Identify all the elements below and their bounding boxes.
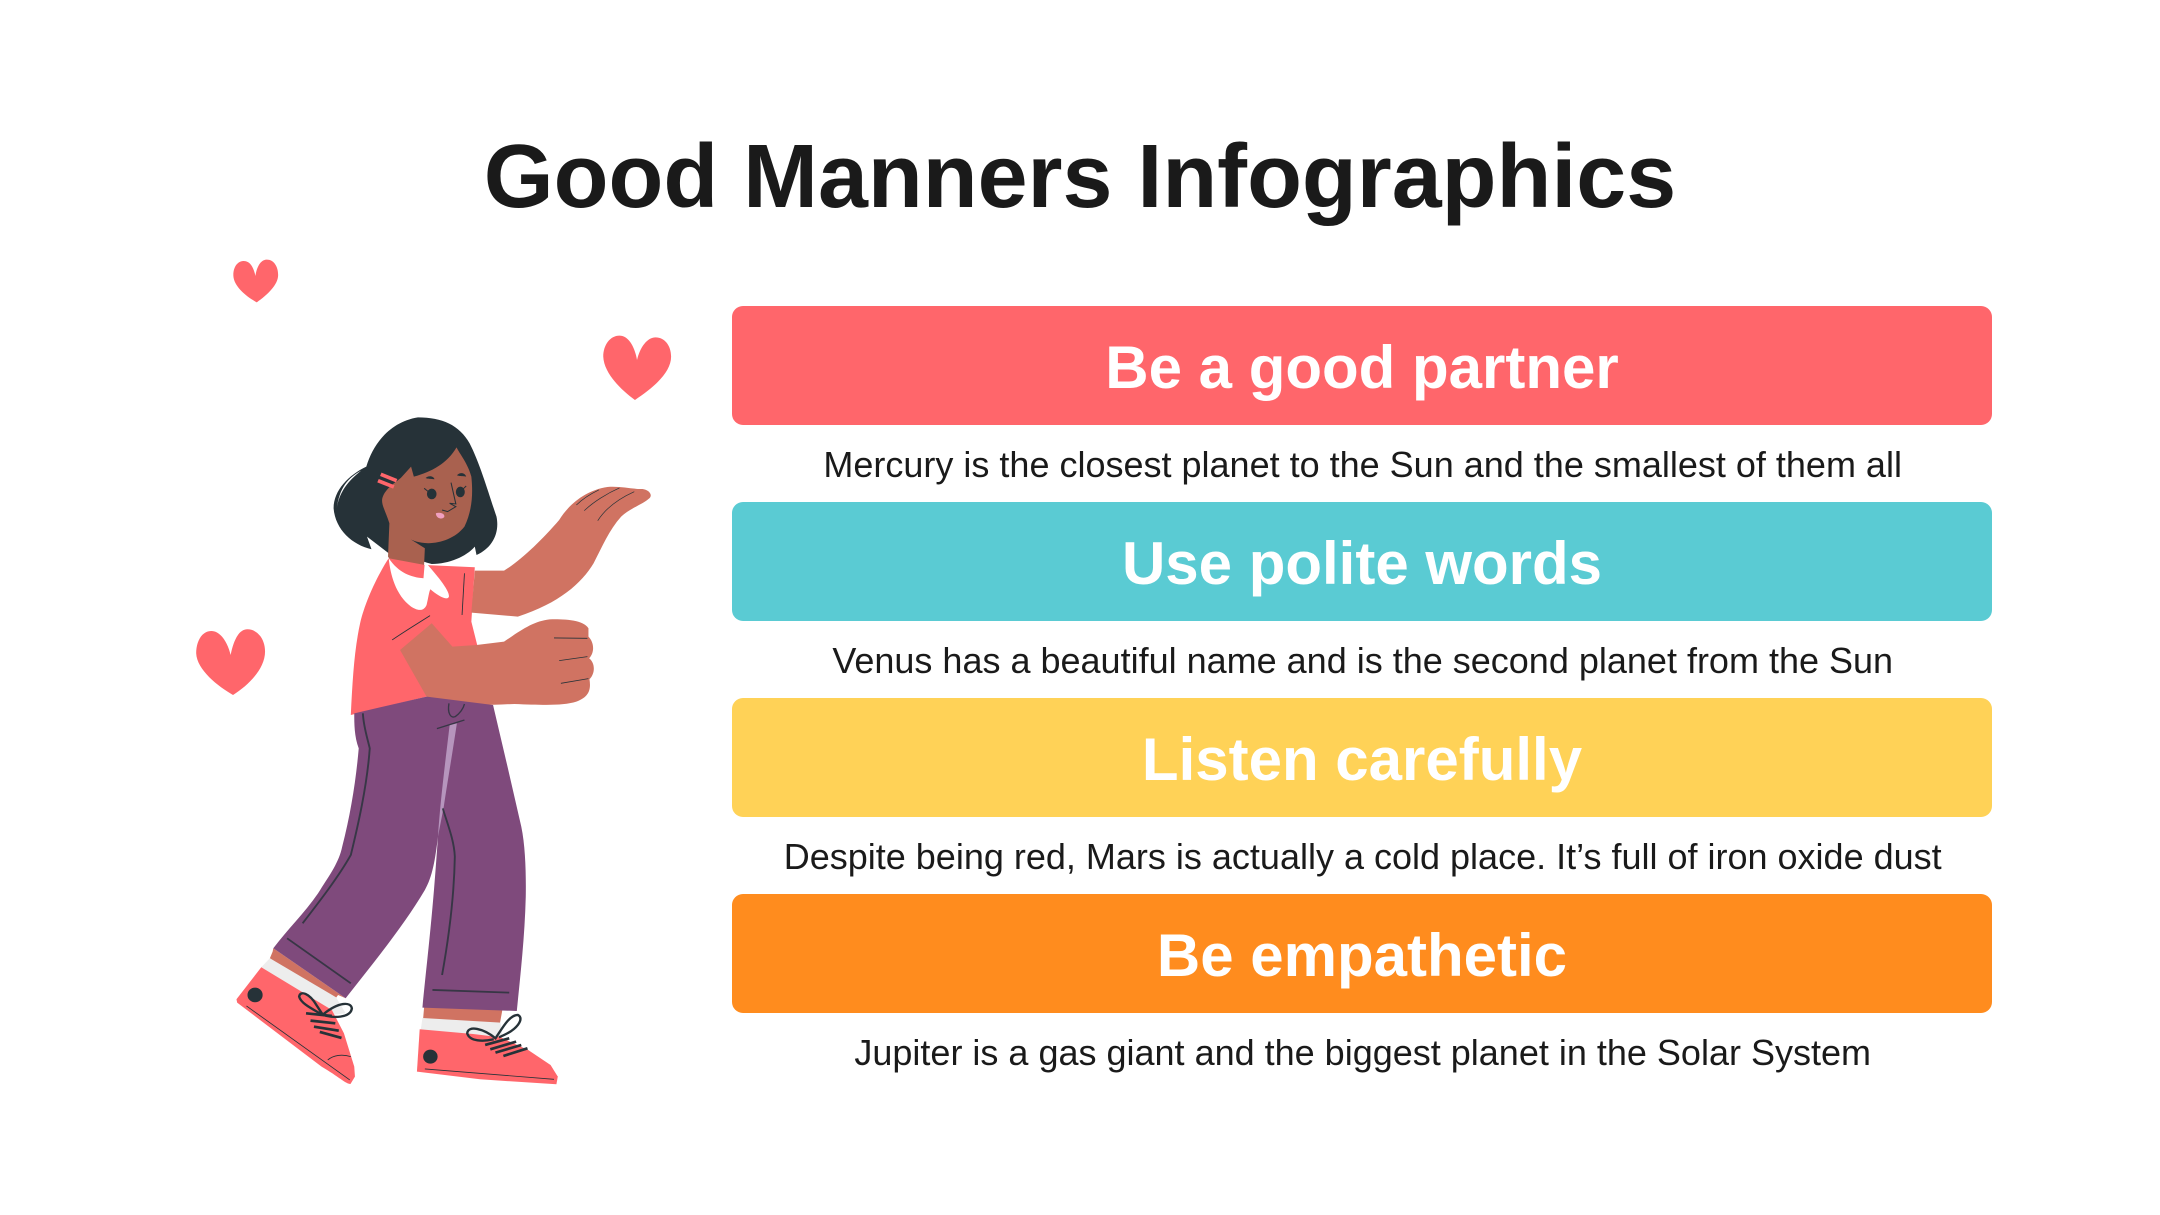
bar: Be empathetic bbox=[732, 894, 1992, 1013]
text: Mars description: Despite being red, Mars is actually a cold place. It’s full of iron oxide dust bbox=[784, 836, 1942, 877]
bar: Use polite words bbox=[732, 502, 1992, 621]
bar: Use polite words: Use polite words bbox=[1122, 530, 1602, 597]
girl: raised arm bbox=[471, 487, 651, 617]
girl: left shoe details bbox=[246, 988, 352, 1080]
title: Good Manners Infographics bbox=[484, 126, 1676, 226]
girl: left sock bbox=[261, 958, 346, 1017]
text: Jupiter description: Jupiter is a gas giant and the biggest planet in the Solar System bbox=[854, 1032, 1871, 1073]
girl: shirt bbox=[351, 558, 495, 715]
bar: Listen carefully bbox=[732, 698, 1992, 817]
text: Venus description: Venus has a beautiful name and is the second planet from the Sun bbox=[832, 640, 1893, 681]
girl: facial features bbox=[424, 473, 466, 512]
girl: shirt creases bbox=[392, 573, 464, 640]
girl: right shoe details bbox=[423, 1015, 554, 1079]
bar: Be a good partner: Be a good partner bbox=[1105, 334, 1619, 401]
icon: heart lower left bbox=[196, 629, 265, 695]
bar: Listen carefully: Listen carefully bbox=[1142, 726, 1582, 793]
girl: right sock bbox=[421, 1018, 502, 1037]
girl: collar bbox=[389, 558, 449, 610]
icon: heart top right bbox=[603, 336, 671, 400]
girl: hair bbox=[334, 417, 497, 564]
bar: Be empathetic: Be empathetic bbox=[1157, 922, 1567, 989]
girl: hair highlight bbox=[336, 471, 361, 512]
girl: trousers bbox=[273, 697, 526, 1011]
girl: raised hand lines bbox=[576, 488, 634, 521]
girl: trouser highlight bbox=[438, 723, 457, 837]
girl: right ankle bbox=[423, 1007, 502, 1023]
icon: heart top left bbox=[233, 260, 278, 302]
girl: left ankle bbox=[270, 948, 346, 1003]
girl: lower hand lines bbox=[554, 638, 588, 683]
girl: trouser seams bbox=[287, 703, 509, 993]
girl: hair clip bbox=[378, 474, 397, 487]
girl: lower arm bbox=[400, 619, 594, 705]
girl: right shoe bbox=[417, 1029, 558, 1084]
girl: mouth bbox=[436, 513, 444, 519]
text: Mercury description: Mercury is the closest planet to the Sun and the smallest of them all bbox=[823, 444, 1902, 485]
girl: left shoe bbox=[236, 967, 355, 1084]
bar: Be a good partner bbox=[732, 306, 1992, 425]
girl: face and neck bbox=[382, 447, 472, 578]
